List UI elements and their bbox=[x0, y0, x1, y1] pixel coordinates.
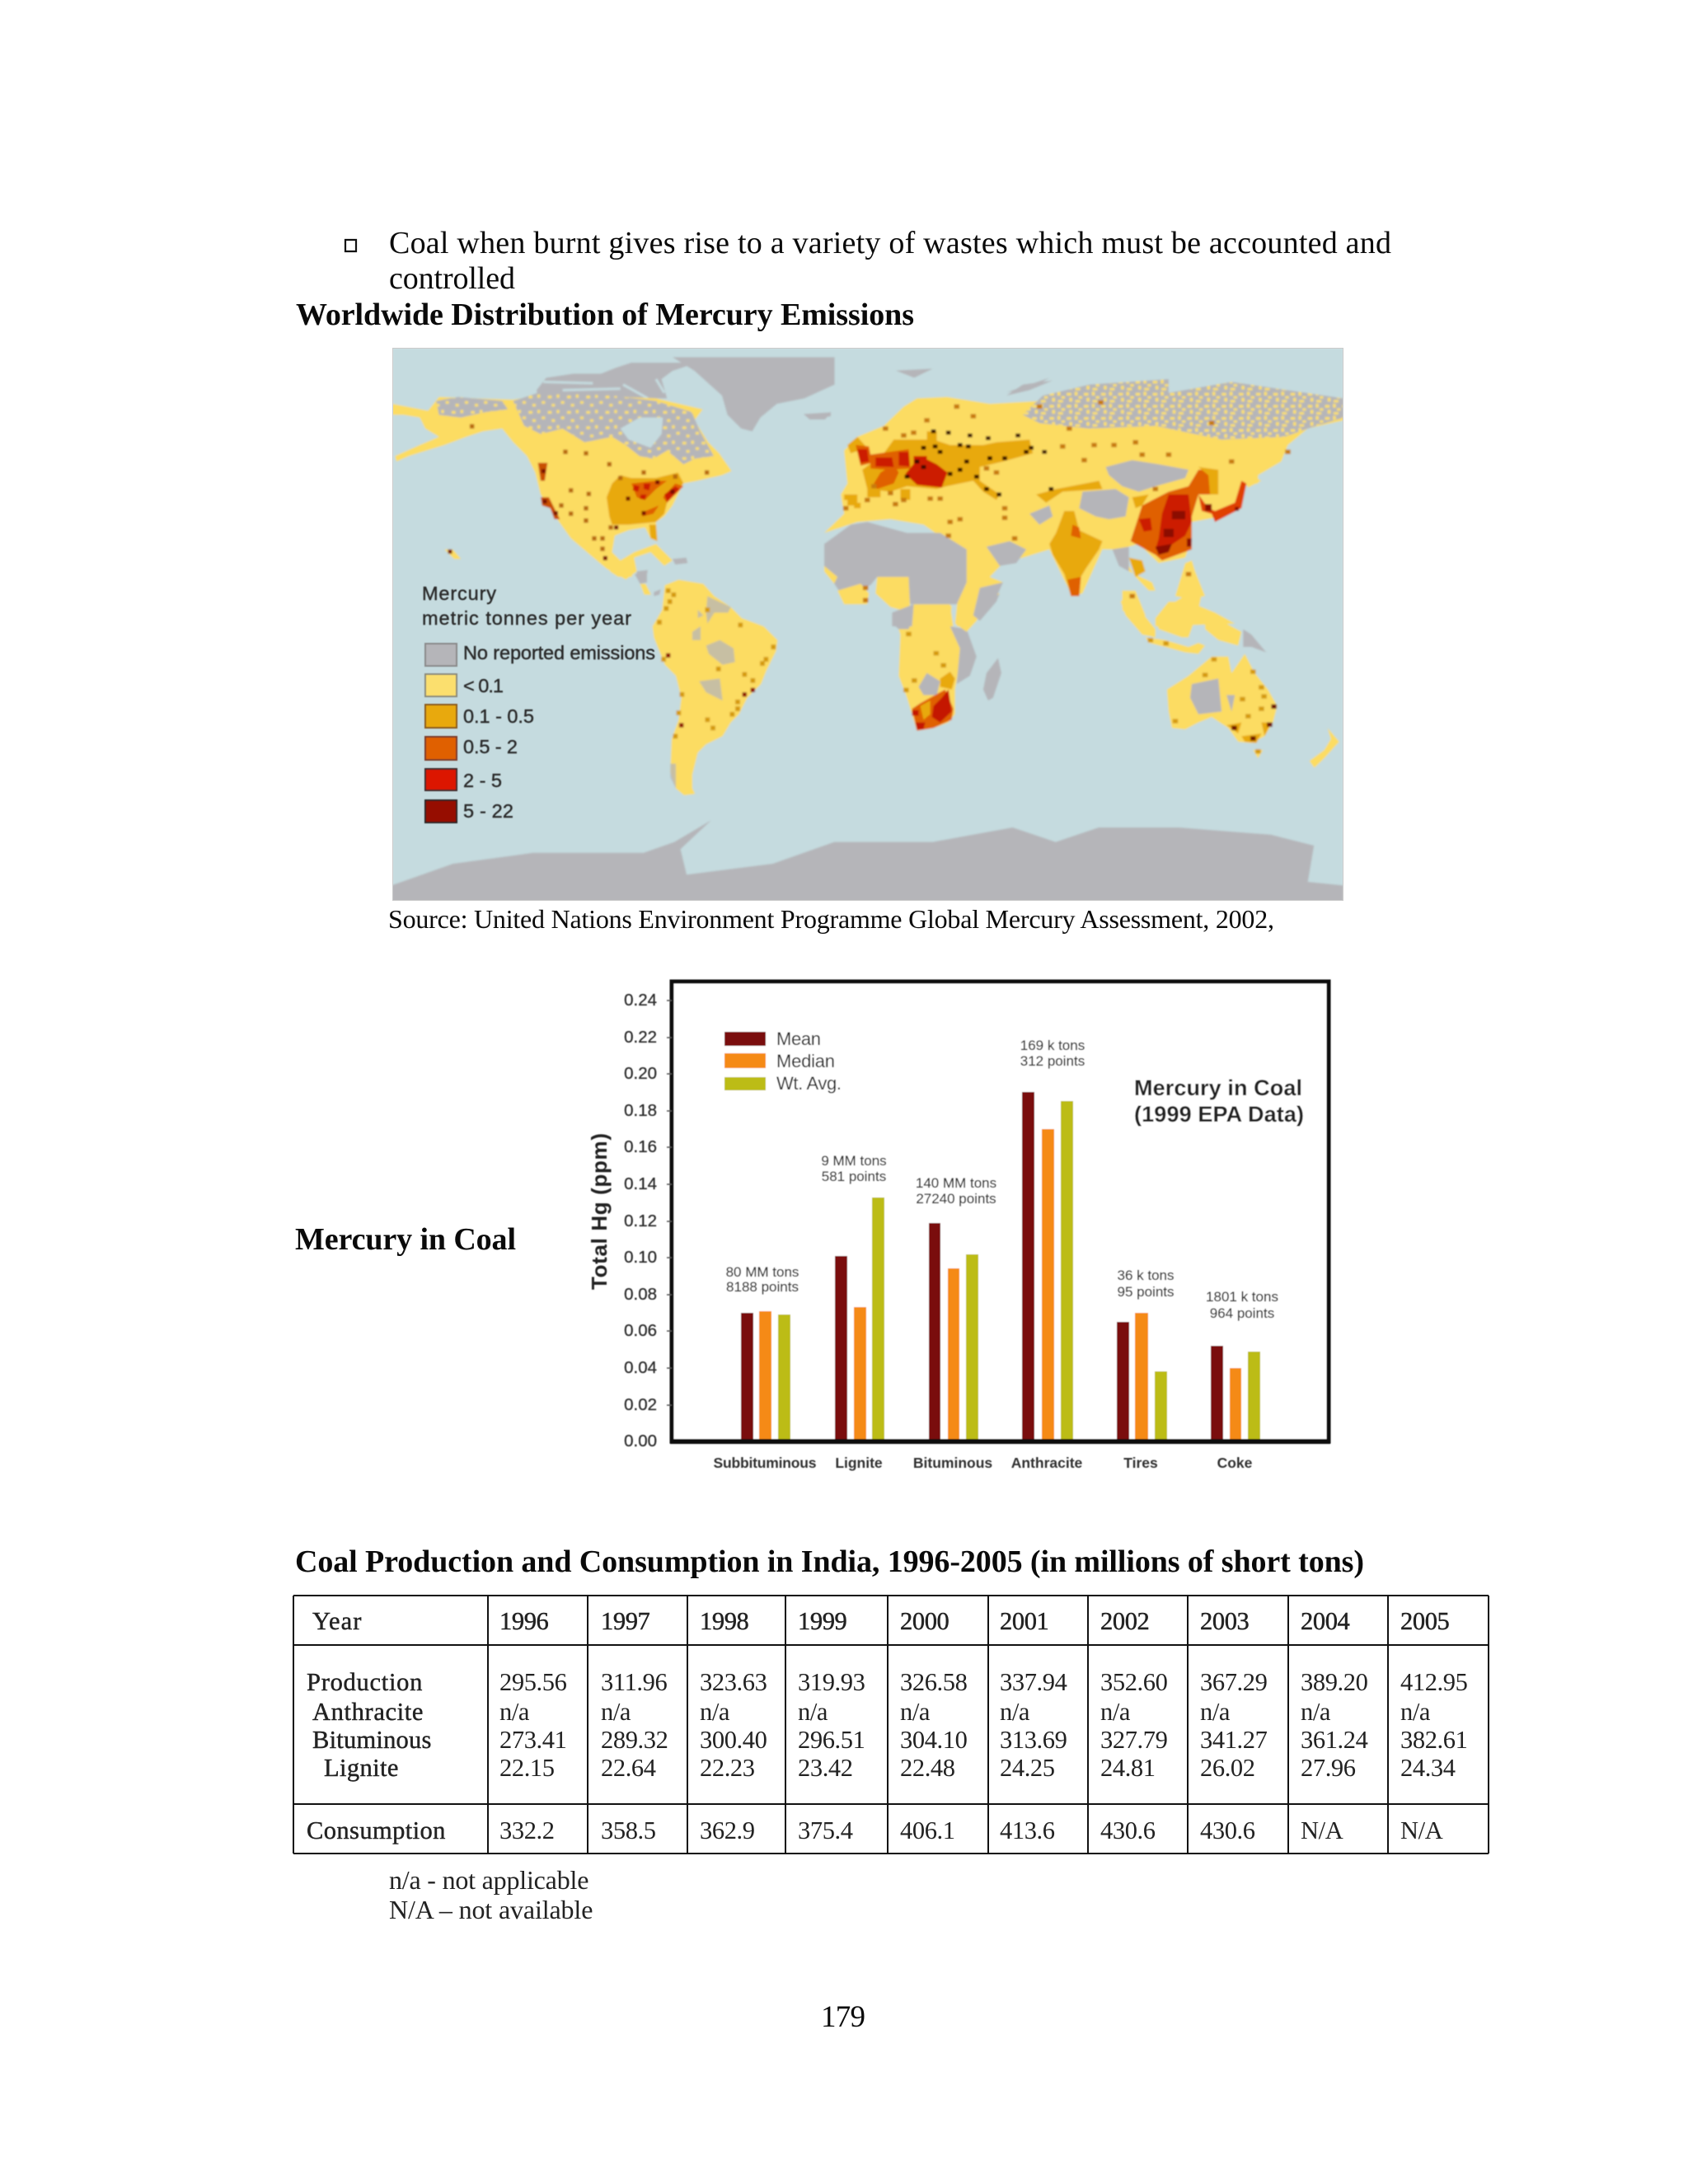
column 2004: 2004 bbox=[1301, 1607, 1350, 1635]
column 1997: n/a bbox=[601, 1698, 631, 1726]
x axis labels: Coke bbox=[1217, 1455, 1253, 1471]
column 2001: 24.25 bbox=[1000, 1754, 1055, 1782]
map legend: 2 - 5 bbox=[463, 770, 502, 791]
column 2001: 337.94 bbox=[1000, 1668, 1067, 1696]
column 2000: n/a bbox=[900, 1698, 931, 1726]
row labels: Anthracite bbox=[312, 1698, 423, 1726]
heading: mercury in coal: Mercury in Coal bbox=[295, 1222, 516, 1257]
column 2003: 367.29 bbox=[1200, 1668, 1267, 1696]
column 2005: 412.95 bbox=[1400, 1668, 1468, 1696]
column 2004 bbox=[1301, 1607, 1368, 1844]
chart title bbox=[1134, 1076, 1304, 1127]
column 1998: 362.9 bbox=[700, 1816, 755, 1844]
table footnotes: n/a - not applicable bbox=[389, 1865, 588, 1895]
y axis labels: 0.22 bbox=[624, 1028, 657, 1047]
chart legend: Mean bbox=[776, 1029, 821, 1049]
column 2005: n/a bbox=[1400, 1698, 1431, 1726]
column 1996: 1996 bbox=[499, 1607, 549, 1635]
y axis labels bbox=[624, 991, 672, 1451]
row labels bbox=[307, 1607, 445, 1844]
column 1996: 273.41 bbox=[499, 1726, 566, 1754]
column 2004: N/A bbox=[1301, 1816, 1343, 1844]
bar annotations: 9 MM tons bbox=[821, 1153, 887, 1169]
bullet point text: Coal when burnt gives rise to a variety of wastes which must be accounted and bbox=[389, 226, 1391, 260]
row labels: Lignite bbox=[324, 1754, 398, 1782]
bars: lignite bbox=[835, 1197, 884, 1441]
y axis labels: 0.12 bbox=[624, 1212, 657, 1230]
column 2004: n/a bbox=[1301, 1698, 1331, 1726]
bar annotations: 1801 k tons bbox=[1206, 1289, 1278, 1305]
bar chart: mercury in coal bbox=[587, 982, 1330, 1471]
column 1996: 22.15 bbox=[499, 1754, 555, 1782]
bar annotations: 312 points bbox=[1020, 1053, 1085, 1069]
column 2005: N/A bbox=[1400, 1816, 1443, 1844]
column 2003: 26.02 bbox=[1200, 1754, 1255, 1782]
map legend: 5 - 22 bbox=[463, 800, 513, 822]
column 2002 bbox=[1100, 1607, 1168, 1844]
bullet point text bbox=[345, 226, 1391, 296]
x axis labels: Anthracite bbox=[1011, 1455, 1083, 1471]
column 2005: 2005 bbox=[1400, 1607, 1450, 1635]
page number: 179 bbox=[821, 2000, 865, 2034]
y axis labels: 0.10 bbox=[624, 1248, 657, 1267]
column 1999: 23.42 bbox=[798, 1754, 853, 1782]
y axis labels: 0.20 bbox=[624, 1064, 657, 1083]
row labels: Consumption bbox=[307, 1816, 445, 1844]
column 2000: 22.48 bbox=[900, 1754, 955, 1782]
bar annotations: 581 points bbox=[822, 1169, 886, 1184]
y axis labels: 0.00 bbox=[624, 1432, 657, 1451]
column 2003 bbox=[1200, 1607, 1268, 1844]
y axis labels: 0.06 bbox=[624, 1321, 657, 1340]
bars: coke bbox=[1211, 1346, 1260, 1441]
bar annotations: 8188 points bbox=[726, 1279, 799, 1295]
column 1997: 22.64 bbox=[601, 1754, 656, 1782]
row labels: Bituminous bbox=[312, 1726, 431, 1754]
y axis labels: 0.04 bbox=[624, 1358, 657, 1377]
column 1999: 296.51 bbox=[798, 1726, 865, 1754]
x axis labels bbox=[714, 1455, 1253, 1471]
column 2004: 389.20 bbox=[1301, 1668, 1368, 1696]
column 2000: 406.1 bbox=[900, 1816, 955, 1844]
bars: anthracite bbox=[1022, 1092, 1073, 1441]
heading: coal production table: Coal Production and Consumption in India, 1996-2005 (in millions of short tons) bbox=[295, 1544, 1364, 1579]
bullet point text: controlled bbox=[389, 261, 515, 296]
map legend bbox=[422, 583, 655, 823]
column 1996: 332.2 bbox=[499, 1816, 555, 1844]
column 1997: 1997 bbox=[601, 1607, 650, 1635]
column 1998 bbox=[700, 1607, 767, 1844]
column 2004: 361.24 bbox=[1301, 1726, 1368, 1754]
column 2002: 327.79 bbox=[1100, 1726, 1167, 1754]
column 2002: 430.6 bbox=[1100, 1816, 1156, 1844]
column 1998: n/a bbox=[700, 1698, 730, 1726]
column 2000 bbox=[900, 1607, 968, 1844]
world map of mercury emissions bbox=[392, 348, 1343, 903]
x axis labels: Tires bbox=[1123, 1455, 1158, 1471]
column 1997: 289.32 bbox=[601, 1726, 668, 1754]
x axis labels: Bituminous bbox=[913, 1455, 992, 1471]
column 2003: 341.27 bbox=[1200, 1726, 1268, 1754]
column 2001 bbox=[1000, 1607, 1067, 1844]
map legend: Mercury bbox=[422, 583, 496, 604]
map legend: 0.1 - 0.5 bbox=[463, 705, 534, 727]
column 1996: 295.56 bbox=[499, 1668, 567, 1696]
table footnotes: N/A – not available bbox=[389, 1895, 593, 1924]
column 1999: 375.4 bbox=[798, 1816, 853, 1844]
column 2002: n/a bbox=[1100, 1698, 1131, 1726]
column 2001: n/a bbox=[1000, 1698, 1030, 1726]
column 1998: 300.40 bbox=[700, 1726, 767, 1754]
column 2002: 24.81 bbox=[1100, 1754, 1156, 1782]
column 1997 bbox=[601, 1607, 668, 1844]
icon: hollow square bullet bbox=[345, 240, 356, 251]
column 2001: 2001 bbox=[1000, 1607, 1048, 1635]
chart title: Mercury in Coal bbox=[1134, 1076, 1302, 1100]
map legend: < 0.1 bbox=[463, 675, 504, 696]
bar annotations bbox=[726, 1038, 1278, 1321]
x axis labels: Lignite bbox=[835, 1455, 883, 1471]
column 1996 bbox=[499, 1607, 567, 1844]
chart title: (1999 EPA Data) bbox=[1134, 1102, 1304, 1127]
y axis labels: 0.24 bbox=[624, 991, 657, 1010]
heading: worldwide distribution: Worldwide Distribution of Mercury Emissions bbox=[296, 298, 914, 332]
y axis labels: 0.14 bbox=[624, 1174, 657, 1193]
bar annotations: 169 k tons bbox=[1020, 1038, 1085, 1053]
bar annotations: 80 MM tons bbox=[726, 1264, 799, 1280]
map legend: metric tonnes per year bbox=[422, 607, 631, 629]
map legend: 0.5 - 2 bbox=[463, 736, 518, 757]
y axis title: Total Hg (ppm) bbox=[587, 1133, 612, 1290]
bar annotations: 95 points bbox=[1118, 1284, 1174, 1300]
column 2003: n/a bbox=[1200, 1698, 1231, 1726]
column 1999: n/a bbox=[798, 1698, 828, 1726]
bar annotations: 964 points bbox=[1210, 1305, 1274, 1321]
column 2001: 313.69 bbox=[1000, 1726, 1067, 1754]
bars: bituminous bbox=[929, 1223, 978, 1441]
bar annotations: 27240 points bbox=[916, 1191, 996, 1207]
column 1998: 1998 bbox=[700, 1607, 749, 1635]
table footnotes bbox=[389, 1865, 593, 1924]
y axis labels: 0.08 bbox=[624, 1285, 657, 1304]
map legend: No reported emissions bbox=[463, 642, 655, 663]
column 1999: 1999 bbox=[798, 1607, 846, 1635]
column 1997: 311.96 bbox=[601, 1668, 667, 1696]
column 2005: 382.61 bbox=[1400, 1726, 1467, 1754]
column 1999 bbox=[798, 1607, 865, 1844]
bar annotations: 140 MM tons bbox=[916, 1175, 996, 1191]
column 1996: n/a bbox=[499, 1698, 530, 1726]
column 1997: 358.5 bbox=[601, 1816, 656, 1844]
column 2000: 2000 bbox=[900, 1607, 950, 1635]
column 2000: 326.58 bbox=[900, 1668, 968, 1696]
column 2000: 304.10 bbox=[900, 1726, 968, 1754]
column 2001: 413.6 bbox=[1000, 1816, 1055, 1844]
table: coal production and consumption bbox=[293, 1596, 1489, 1854]
x axis labels: Subbituminous bbox=[714, 1455, 817, 1471]
column 2003: 2003 bbox=[1200, 1607, 1250, 1635]
map source caption: Source: United Nations Environment Programme Global Mercury Assessment, 2002, bbox=[388, 904, 1274, 934]
column 2004: 27.96 bbox=[1301, 1754, 1356, 1782]
bars: tires bbox=[1117, 1313, 1167, 1441]
bars: subbituminous bbox=[741, 1311, 790, 1441]
y axis labels: 0.16 bbox=[624, 1137, 657, 1156]
column 2003: 430.6 bbox=[1200, 1816, 1255, 1844]
y axis labels: 0.18 bbox=[624, 1101, 657, 1120]
chart frame bbox=[672, 982, 1329, 1441]
chart legend: Median bbox=[776, 1051, 835, 1071]
row labels: Production bbox=[307, 1668, 422, 1696]
chart legend bbox=[724, 1029, 842, 1094]
bar annotations: 36 k tons bbox=[1118, 1268, 1174, 1283]
chart legend: Wt. Avg. bbox=[776, 1073, 842, 1094]
column 1999: 319.93 bbox=[798, 1668, 865, 1696]
column 2002: 2002 bbox=[1100, 1607, 1149, 1635]
column 1998: 22.23 bbox=[700, 1754, 755, 1782]
row labels: Year bbox=[312, 1607, 361, 1635]
column 1998: 323.63 bbox=[700, 1668, 767, 1696]
column 2005 bbox=[1400, 1607, 1468, 1844]
y axis labels: 0.02 bbox=[624, 1395, 657, 1414]
column 2005: 24.34 bbox=[1400, 1754, 1456, 1782]
column 2002: 352.60 bbox=[1100, 1668, 1168, 1696]
